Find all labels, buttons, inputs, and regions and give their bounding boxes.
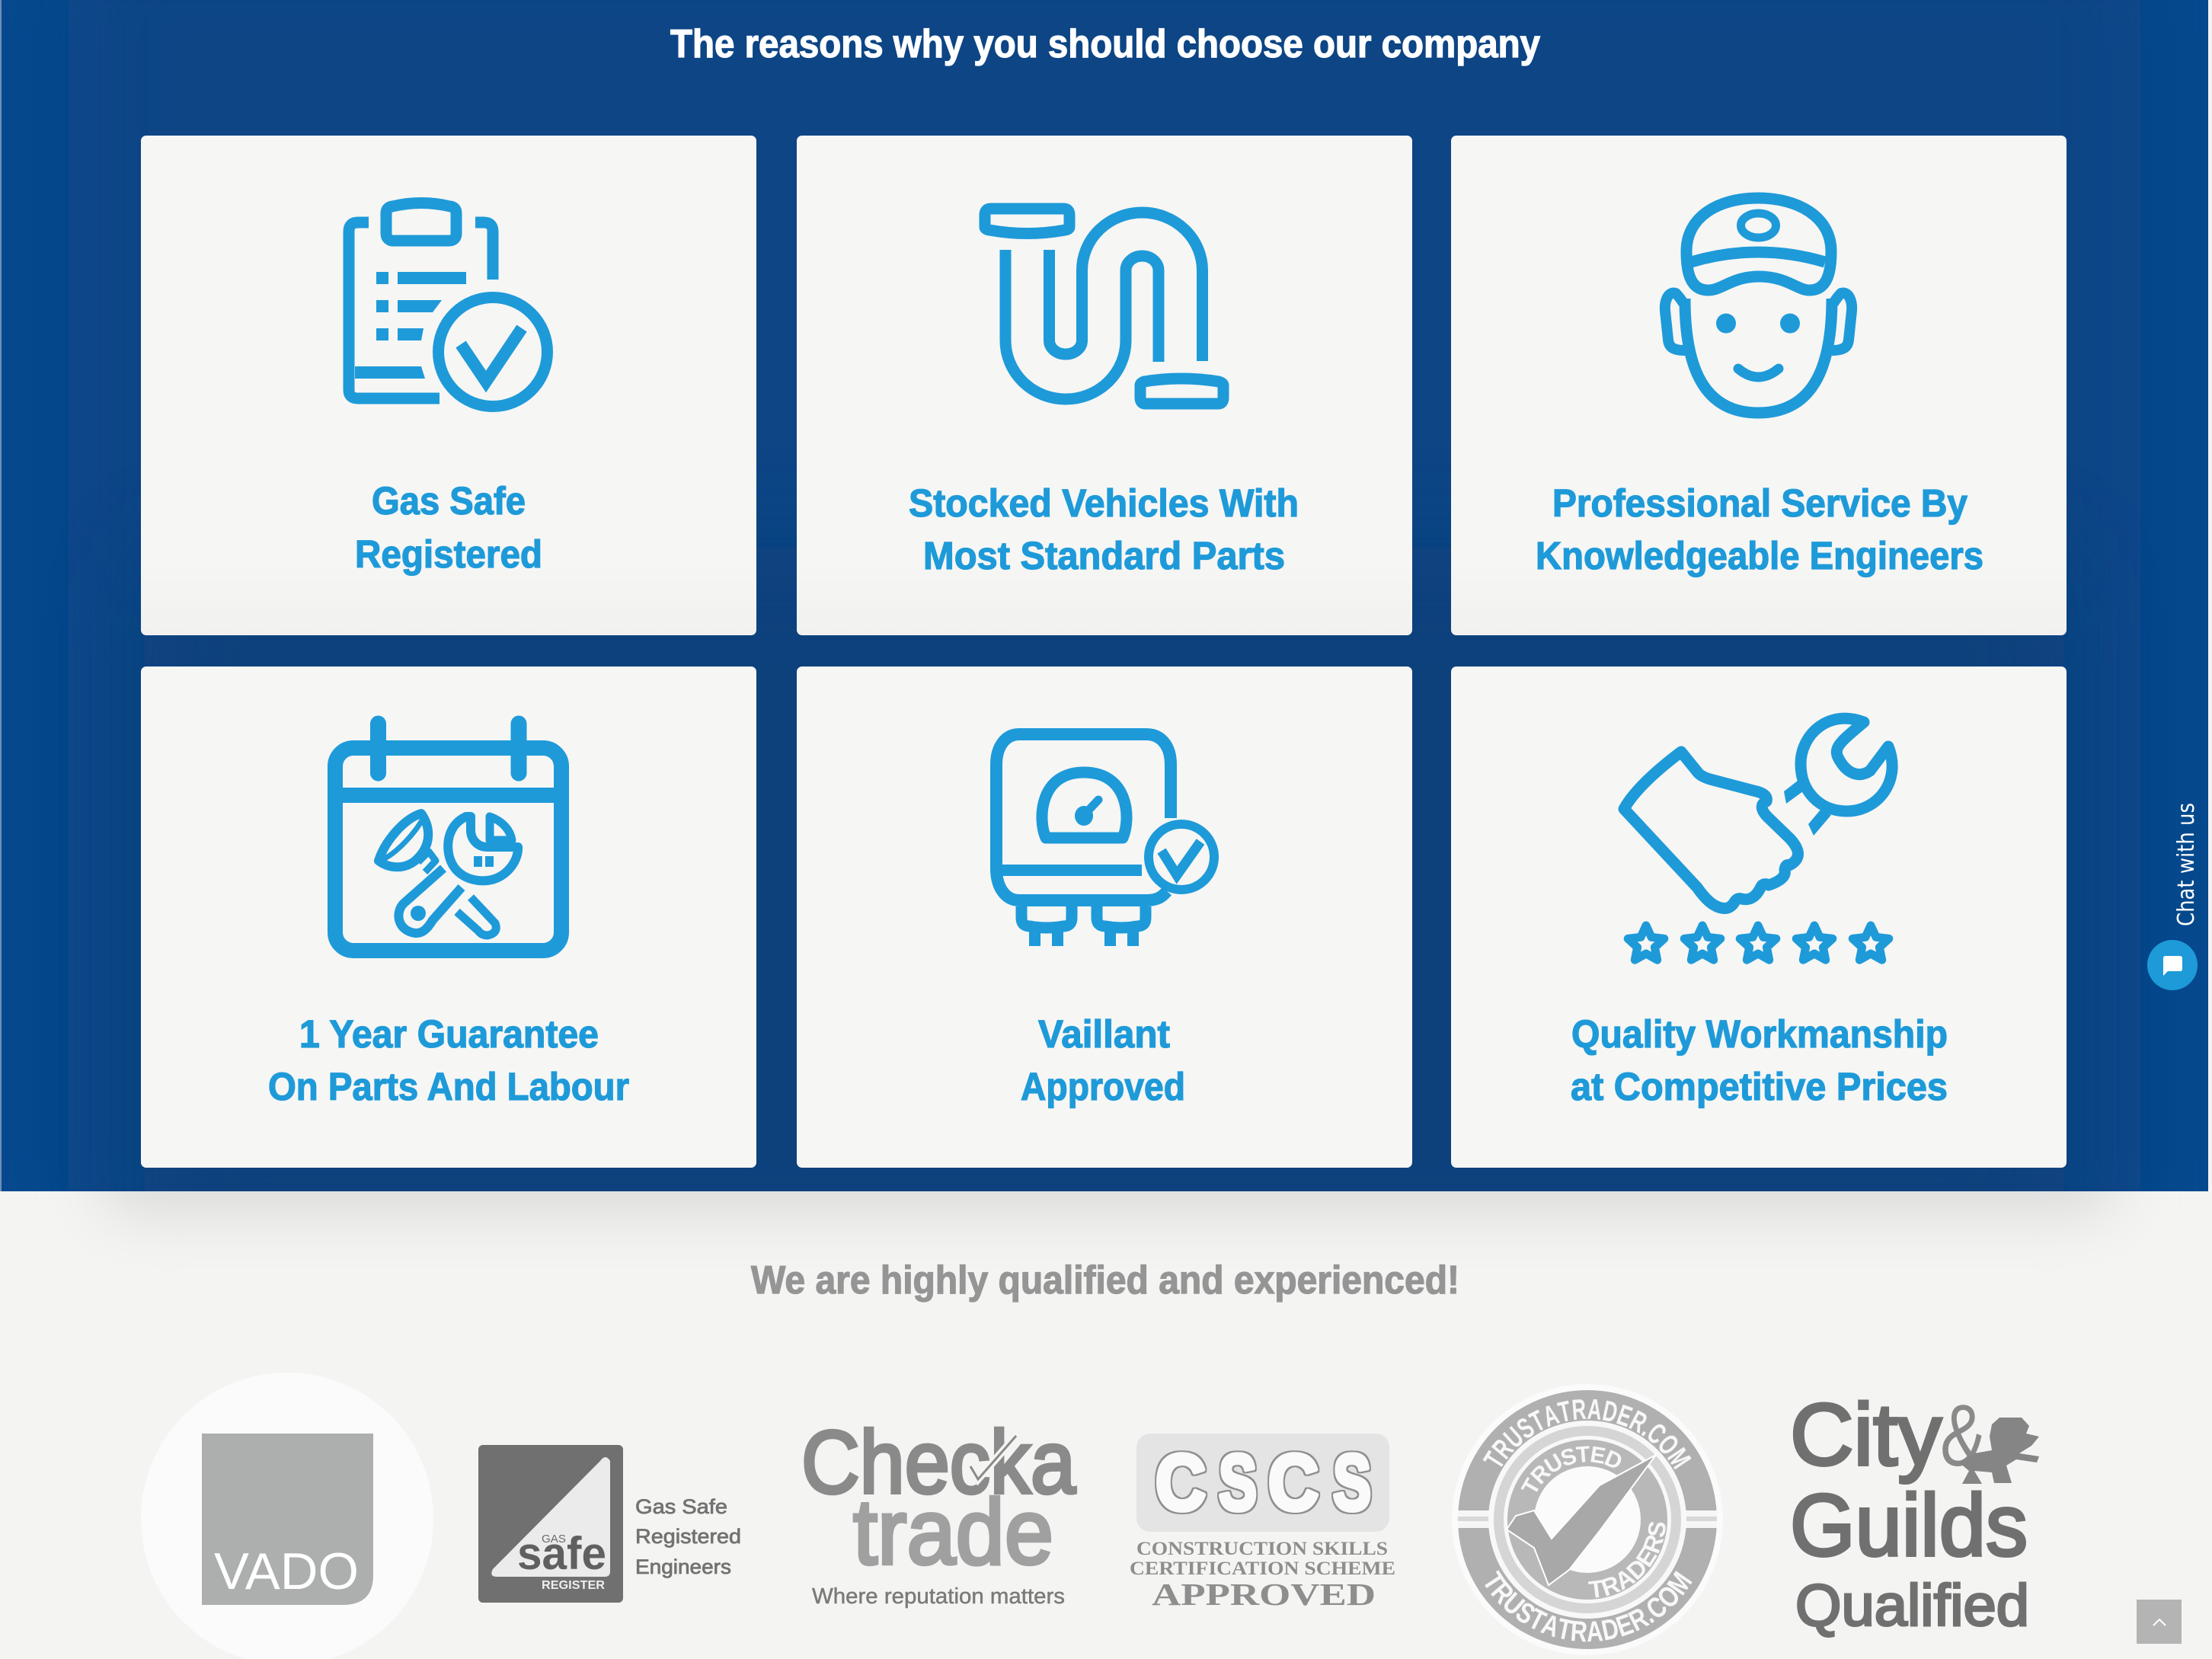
card background xyxy=(141,666,756,1168)
logo: TrustATrader seal: S xyxy=(1510,1596,1540,1631)
panel: blue reasons section xyxy=(0,0,2208,1280)
logo: City & Guilds qualified: Qualified xyxy=(1795,1573,2029,1638)
logo: Gas Safe register xyxy=(478,1445,741,1603)
logo: TrustATrader seal: R xyxy=(1486,1433,1520,1465)
label: quality workmanship: Quality Workmanship xyxy=(1571,1012,1948,1056)
panel: vaillant approved xyxy=(797,666,1412,1168)
card background xyxy=(797,666,1412,1168)
logo: CSCS approved: CONSTRUCTION SKILLS xyxy=(1136,1539,1388,1559)
logo: TrustATrader seal: T xyxy=(1555,1395,1574,1428)
icon: chat bubble xyxy=(2147,940,2198,990)
logo: CSCS approved: C xyxy=(1156,1439,1206,1527)
logo: Gas Safe register: Gas Safe xyxy=(635,1495,727,1518)
logo: City & Guilds qualified: City xyxy=(1790,1386,1942,1484)
heading: qualifications: We are highly qualified and experienced! xyxy=(751,1258,1459,1303)
label: 1 year guarantee: 1 Year Guarantee xyxy=(299,1012,599,1056)
logo: TrustATrader seal: A xyxy=(1587,1393,1603,1426)
logo: TrustATrader seal: T xyxy=(1555,1613,1574,1647)
logo: Checkatrade: Checka xyxy=(801,1412,1076,1512)
logo: TrustATrader seal: M xyxy=(1661,1443,1697,1474)
logo: Vado: VADO xyxy=(214,1542,359,1600)
icon: clipboard with check xyxy=(349,203,547,407)
logo: TrustATrader seal: A xyxy=(1537,1608,1564,1644)
logo: TrustATrader seal: R xyxy=(1624,1602,1654,1638)
logo: TrustATrader seal: R xyxy=(1569,1616,1589,1648)
logo: Gas Safe register: Engineers xyxy=(635,1555,731,1578)
logo: City & Guilds qualified xyxy=(1790,1386,2039,1638)
logo: TrustATrader seal: A xyxy=(1585,1616,1604,1648)
icon: engineer with cap xyxy=(1665,198,1852,413)
icon: hand, wrench and five stars xyxy=(1624,718,1892,960)
logo: TrustATrader seal: D xyxy=(1599,1613,1622,1648)
label: professional service xyxy=(1536,481,1983,577)
label: stocked vehicles xyxy=(909,481,1299,577)
logo: TrustATrader seal: T xyxy=(1523,1603,1551,1638)
logo: TrustATrader seal: TRADERS xyxy=(1588,1522,1666,1598)
label: stocked vehicles: Stocked Vehicles With xyxy=(909,481,1299,525)
logo: Gas Safe register: Registered xyxy=(635,1525,741,1548)
logo: TrustATrader seal: O xyxy=(1651,1428,1686,1461)
section shadow on light background xyxy=(99,1127,2118,1215)
panel: 1 year guarantee xyxy=(141,666,756,1168)
icon: boiler with check xyxy=(996,734,1214,946)
logo: TrustATrader seal: R xyxy=(1485,1577,1520,1610)
logo: TrustATrader seal: . xyxy=(1637,1600,1660,1630)
card background xyxy=(141,136,756,635)
logo: TrustATrader seal: T xyxy=(1525,1404,1550,1438)
label: 1 year guarantee xyxy=(268,1012,629,1108)
logo: Checkatrade: Where reputation matters xyxy=(812,1584,1065,1609)
logo: TrustATrader seal: T xyxy=(1476,1567,1510,1597)
logo: TrustATrader seal: E xyxy=(1613,1398,1636,1433)
logo: Checkatrade xyxy=(801,1412,1076,1609)
logo: Gas Safe register: GAS xyxy=(542,1533,566,1546)
card background xyxy=(797,136,1412,635)
label: gas safe registered: Gas Safe xyxy=(372,479,526,523)
label: gas safe registered xyxy=(355,479,542,576)
logo: TrustATrader seal: T xyxy=(1478,1446,1511,1474)
chat widget xyxy=(2147,803,2200,990)
scroll to top button xyxy=(2137,1600,2182,1644)
logo: Vado xyxy=(141,1373,433,1659)
card background xyxy=(1451,136,2067,635)
label: stocked vehicles: Most Standard Parts xyxy=(923,534,1285,577)
panel: professional service xyxy=(1451,136,2067,635)
logo: TrustATrader seal: R xyxy=(1571,1393,1587,1426)
logo: CSCS approved: APPROVED xyxy=(1152,1577,1376,1612)
label: professional service: Professional Service By xyxy=(1552,481,1968,525)
logo: CSCS approved xyxy=(1130,1434,1395,1612)
logo: TrustATrader seal: A xyxy=(1539,1398,1563,1433)
logo: TrustATrader seal: R xyxy=(1625,1405,1652,1439)
logo: TrustATrader seal: TRUSTED xyxy=(1520,1446,1621,1491)
logo: TrustATrader seal: D xyxy=(1600,1395,1620,1429)
card background xyxy=(1451,666,2067,1168)
logo: TrustATrader seal: M xyxy=(1661,1567,1699,1600)
label: quality workmanship: at Competitive Prices xyxy=(1571,1065,1948,1108)
logo: Checkatrade: trade xyxy=(853,1480,1053,1584)
title: The reasons why you should choose our company xyxy=(670,22,1540,66)
logo: Gas Safe register: REGISTER xyxy=(542,1579,605,1592)
label: professional service: Knowledgeable Engineers xyxy=(1536,534,1983,577)
label: 1 year guarantee: On Parts And Labour xyxy=(268,1065,629,1108)
logo: TrustATrader seal: O xyxy=(1651,1580,1687,1615)
logo: TrustATrader seal: E xyxy=(1613,1608,1638,1644)
label: quality workmanship xyxy=(1571,1012,1948,1108)
logo: Gas Safe register: safe xyxy=(517,1528,606,1579)
logo: TrustATrader seal: C xyxy=(1641,1417,1672,1450)
logo: TrustATrader seal: U xyxy=(1497,1587,1530,1622)
label: gas safe registered: Registered xyxy=(355,532,542,576)
panel: stocked vehicles xyxy=(797,136,1412,635)
logo: TrustATrader seal: C xyxy=(1641,1590,1673,1626)
icon: calendar with tools xyxy=(328,724,569,951)
label: vaillant approved: Approved xyxy=(1021,1065,1185,1108)
label: vaillant approved: Vaillant xyxy=(1038,1012,1170,1056)
label: vaillant approved xyxy=(1021,1012,1185,1108)
icon: pipe trap xyxy=(985,209,1223,404)
logo: CSCS approved: S xyxy=(1219,1439,1257,1527)
logo: TrustATrader seal: S xyxy=(1511,1411,1540,1445)
logo: TrustATrader seal xyxy=(1452,1384,1723,1655)
logo: TrustATrader seal: . xyxy=(1637,1412,1659,1442)
logo: City & Guilds qualified: Guilds xyxy=(1790,1477,2028,1574)
panel: gas safe registered xyxy=(141,136,756,635)
logo: CSCS approved: C xyxy=(1268,1439,1319,1527)
logo: City & Guilds qualified: & xyxy=(1940,1387,1987,1485)
logo: CSCS approved: S xyxy=(1333,1439,1371,1527)
logo: TrustATrader seal: U xyxy=(1498,1421,1530,1454)
logo: CSCS approved: CERTIFICATION SCHEME xyxy=(1130,1558,1395,1579)
chat label: Chat with us xyxy=(2173,803,2200,926)
panel: quality workmanship xyxy=(1451,666,2067,1168)
